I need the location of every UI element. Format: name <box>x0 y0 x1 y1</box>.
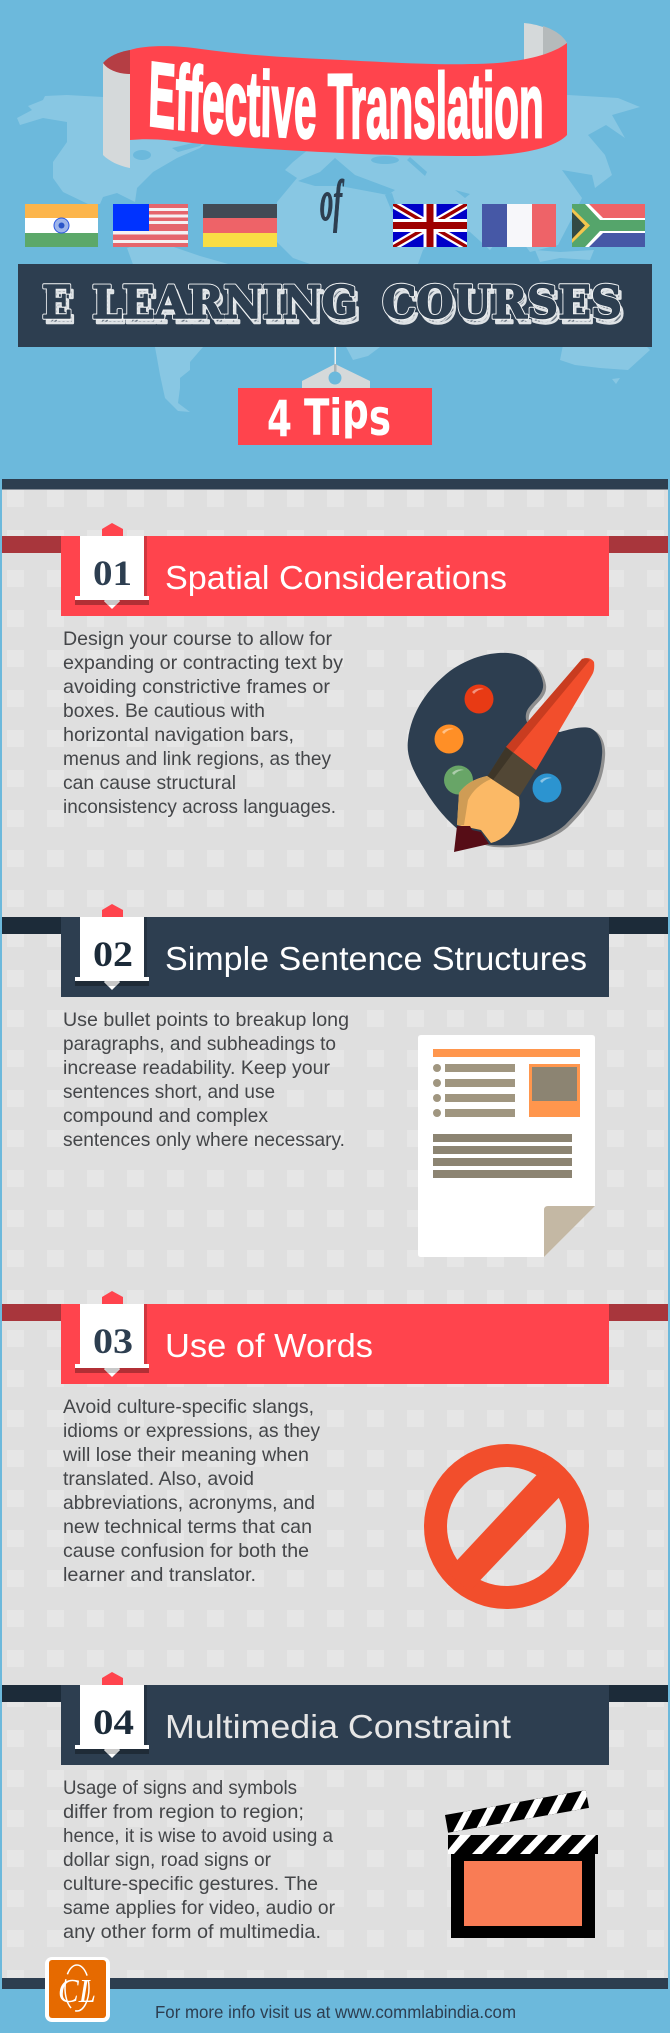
subtitle: E Learning Courses: LEARNING <box>92 276 358 329</box>
body 03: learner and translator. <box>63 1564 256 1586</box>
body 02: compound and complex <box>63 1105 268 1127</box>
subtitle: E Learning Courses: COURSES <box>382 276 622 329</box>
body 02: Use bullet points to breakup long <box>63 1009 349 1031</box>
body 02 <box>63 1009 349 1151</box>
body 04 <box>63 1777 335 1943</box>
body 04: same applies for video, audio or <box>63 1897 335 1919</box>
flag: France <box>482 204 556 247</box>
body 04: dollar sign, road signs or <box>63 1849 271 1871</box>
subtitle: E Learning Courses <box>42 276 625 334</box>
body 02: sentences only where necessary. <box>63 1129 345 1151</box>
4 Tips: Ti <box>304 389 355 447</box>
flag: Germany <box>203 204 277 247</box>
heading 02: Simple Sentence Structures <box>165 940 587 977</box>
body 04: Usage of signs and symbols <box>63 1777 297 1799</box>
subtitle: E Learning Courses: LEARNING <box>92 276 358 329</box>
number tag 04 <box>75 1672 149 1758</box>
body 01 <box>63 628 343 818</box>
subtitle: E Learning Courses: COURSES <box>382 276 622 329</box>
heading 04: Multimedia Constraint <box>165 1708 511 1745</box>
bottom band <box>2 1978 668 1989</box>
number tag 04: 04 <box>93 1702 134 1742</box>
hanging tag <box>238 347 432 448</box>
number tag 01 <box>75 523 149 609</box>
body 01: can cause structural <box>63 772 236 794</box>
body 02: sentences short, and use <box>63 1081 275 1103</box>
body 01: Design your course to allow for <box>63 628 332 650</box>
body 04: culture-specific gestures. The <box>63 1873 318 1895</box>
body 03: new technical terms that can <box>63 1516 312 1538</box>
ribbon banner <box>103 23 567 168</box>
body 02: increase readability. Keep your <box>63 1057 330 1079</box>
body 03: cause confusion for both the <box>63 1540 309 1562</box>
icon: document <box>418 1035 595 1257</box>
content panel <box>2 479 668 1978</box>
number tag 01: 01 <box>93 553 132 593</box>
body 01: boxes. Be cautious with <box>63 700 265 722</box>
subtitle: E Learning Courses: LEARNING <box>95 281 361 334</box>
body 01: avoiding constrictive frames or <box>63 676 331 698</box>
body 04: hence, it is wise to avoid using a <box>63 1825 333 1847</box>
subtitle: E Learning Courses: COURSES <box>385 281 625 334</box>
flag: USA <box>113 204 188 247</box>
body 03: will lose their meaning when <box>62 1444 309 1466</box>
tip 02 <box>2 904 668 1257</box>
body 04: differ from region to region; <box>63 1801 304 1823</box>
number tag 03 <box>75 1291 149 1377</box>
tip 01 <box>2 523 668 852</box>
body 01: expanding or contracting text by <box>63 652 343 674</box>
body 03: abbreviations, acronyms, and <box>63 1492 315 1514</box>
4 Tips <box>267 382 391 448</box>
4 Tips: 4 <box>267 390 292 448</box>
logo: CL <box>58 1973 96 2010</box>
subtitle: E Learning Courses: E <box>45 281 75 334</box>
body 03: translated. Also, avoid <box>63 1468 254 1490</box>
4 Tips: s <box>369 389 391 447</box>
subtitle banner <box>18 264 652 347</box>
subtitle: E Learning Courses: E <box>42 276 72 329</box>
heading 03: Use of Words <box>165 1327 373 1364</box>
flag: India <box>25 204 98 247</box>
number tag 02: 02 <box>93 934 133 974</box>
flag: UK <box>393 204 467 247</box>
flag: South Africa <box>572 204 645 247</box>
body 03: Avoid culture-specific slangs, <box>63 1396 314 1418</box>
tip 04 <box>2 1672 668 1943</box>
body 01: horizontal navigation bars, <box>63 724 294 746</box>
footer text: For more info visit us at www.commlabindia.com <box>155 2002 516 2022</box>
body 04: any other form of multimedia. <box>63 1921 321 1943</box>
number tag 02 <box>75 904 149 990</box>
icon: prohibition sign <box>436 1456 578 1598</box>
title: Effective Translation <box>150 61 542 140</box>
logo <box>45 1957 110 2022</box>
heading 01: Spatial Considerations <box>165 559 507 596</box>
icon: clapperboard <box>445 1789 598 1938</box>
number tag 03: 03 <box>93 1321 133 1361</box>
body 01: inconsistency across languages. <box>63 796 336 818</box>
of: of <box>320 168 345 233</box>
world map <box>17 95 650 412</box>
body 01: menus and link regions, as they <box>63 748 331 770</box>
body 02: paragraphs, and subheadings to <box>63 1033 336 1055</box>
body 03 <box>62 1396 320 1586</box>
4 Tips: p <box>342 382 369 440</box>
icon: palette and brush <box>408 653 605 852</box>
subtitle: E Learning Courses: E <box>42 276 72 329</box>
tip 03 <box>2 1291 668 1598</box>
body 03: idioms or expressions, as they <box>63 1420 320 1442</box>
